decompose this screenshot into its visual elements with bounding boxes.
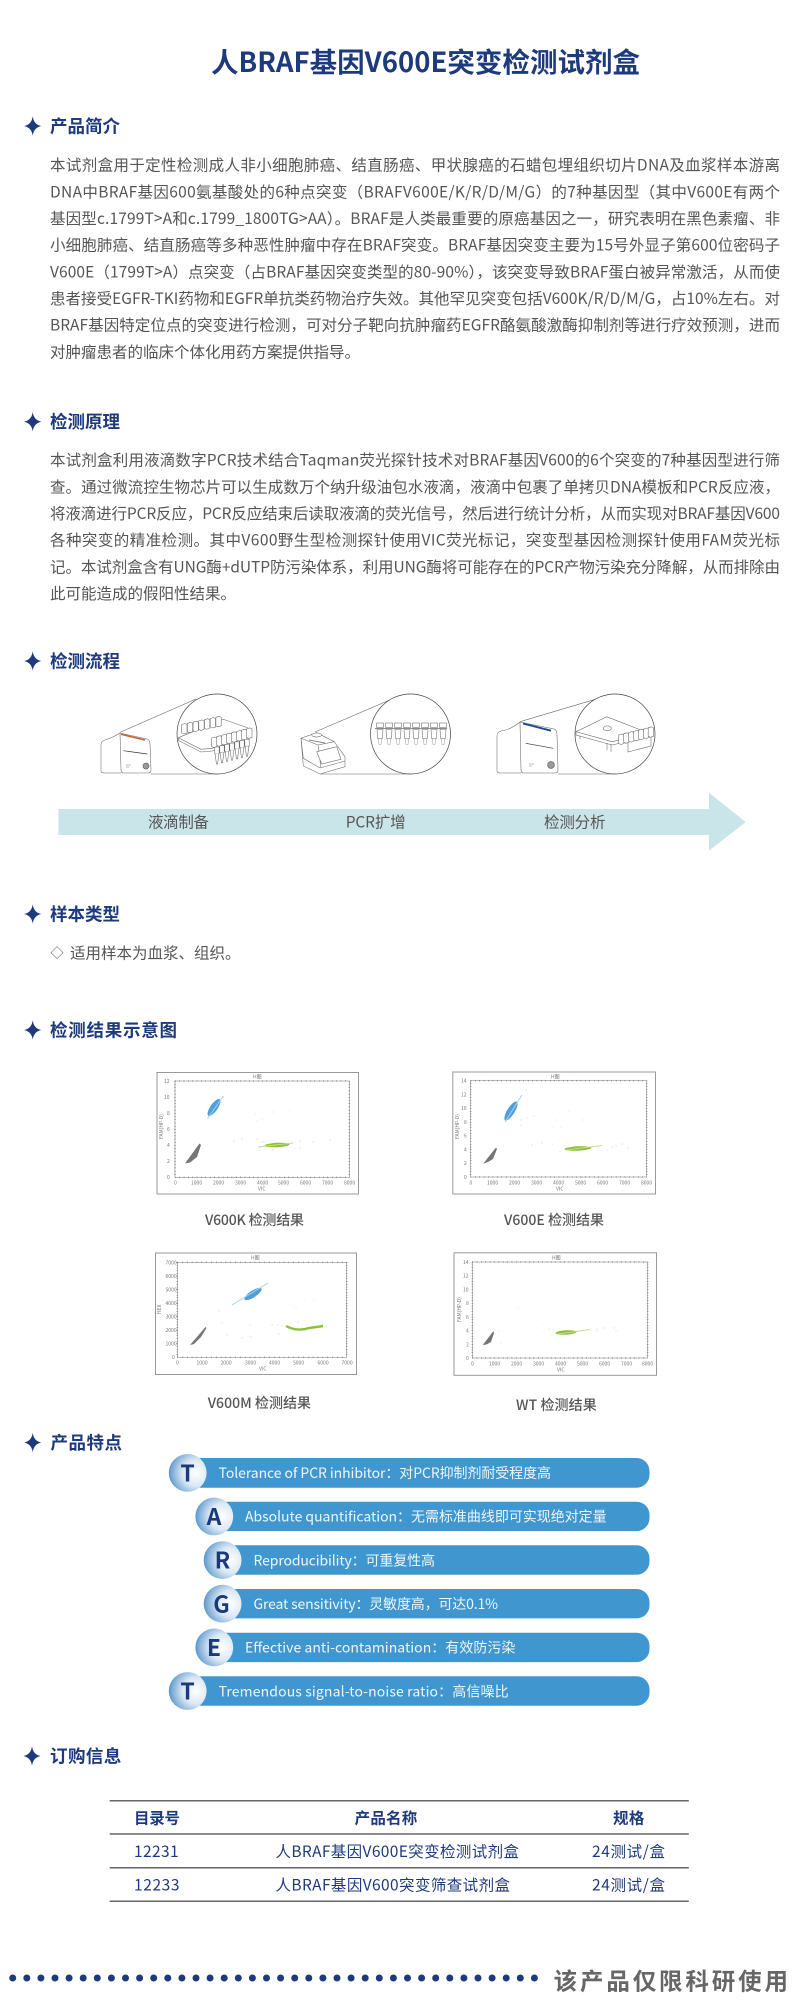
feature: R reproducibility: Reproducibility：可重复性高 [254,1550,435,1570]
chart: V600E result: FAM(HP-D) [454,1114,461,1139]
chart: WT result: 4000 [555,1360,566,1368]
chart: V600K result: 2000 [213,1180,224,1186]
text block: detection principle: 各种突变的精准检测。其中V600野生型检测探针使用VIC荧光标记，突变型基因检测探针使用FAM荧光标 [50,529,780,551]
chart: V600M result: 6000 [318,1360,329,1366]
chart: V600E result: 2000 [509,1180,520,1186]
chart: V600M result: 4000 [269,1360,280,1366]
feature: T tolerance: Tolerance of PCR inhibitor：对PCR抑制剂耐受程度高 [219,1463,551,1483]
table row 12233: 12233 [134,1874,180,1896]
chart: V600K result: 0 [167,1174,170,1181]
chart: V600M result: H图 [251,1254,260,1262]
table header row: 目录号 [134,1806,180,1828]
table header row [134,1806,645,1828]
chart: V600M result: 7000 [342,1360,353,1366]
chart: WT result: VIC [557,1366,565,1374]
feature: T tolerance [169,1454,650,1492]
chart: V600E result: 4000 [553,1180,564,1186]
chart label: V600M: V600M 检测结果 [207,1393,311,1413]
text block: product intro: 小细胞肺癌、结直肠癌等多种恶性肿瘤中存在BRAF突变。BRAF基因突变主要为15号外显子第600位密码子 [50,234,780,256]
chart: V600M result: 0 [172,1354,175,1361]
feature: E effective anti-contamination: E [207,1629,221,1663]
chart: V600K result: H图 [253,1074,262,1080]
chart: V600M result: 4000 [166,1300,177,1307]
chart: V600E result: 5000 [575,1180,586,1186]
step label: droplet generation: 液滴制备 [148,810,209,832]
section: product features [24,1430,650,1710]
chart: V600K result: 1000 [191,1180,202,1186]
table header row: 产品名称 [355,1806,418,1828]
table row 12231: 人BRAF基因V600E突变检测试剂盒 [276,1840,519,1862]
table row 12231: 24测试/盒 [592,1840,665,1862]
feature: T tremendous signal-to-noise: Tremendous signal-to-noise ratio：高信噪比 [219,1681,509,1701]
chart: WT result: 2 [466,1341,469,1348]
feature: R reproducibility: R [215,1542,231,1576]
section: detection principle [24,409,780,604]
chart: V600E result: 14 [461,1078,467,1085]
table row 12231: 12231 [134,1840,179,1862]
text block: product intro: 基因型c.1799T>A和c.1799_1800TG>AA）。BRAF是人类最重要的原癌基因之一，研究表明在黑色素瘤、非 [50,207,780,229]
chart: V600M result: 3000 [245,1360,256,1366]
section: result examples [24,1018,657,1415]
chart: WT result: 7000 [621,1360,632,1368]
chart label: V600E: V600E 检测结果 [503,1210,604,1230]
chart: WT result: 12 [463,1273,469,1280]
chart: WT result: 14 [463,1259,469,1266]
chart: V600E result: 1000 [487,1180,498,1186]
chart: WT result: 0 [466,1355,469,1362]
chart: V600K result: 8000 [344,1180,355,1186]
chart: V600M result: 1000 [196,1360,208,1366]
text block: product intro: 本试剂盒用于定性检测成人非小细胞肺癌、结直肠癌、甲状腺癌的石蜡包埋组织切片DNA及血浆样本游离 [50,154,780,176]
chart: V600K result: 4000 [257,1180,268,1186]
feature: A absolute quantification: Absolute quantification：无需标准曲线即可实现绝对定量 [245,1507,607,1527]
illustration: PCR thermal cycler with inset [301,694,450,774]
chart: V600K result: 10 [164,1094,170,1101]
text: sample type: ◇ [50,942,64,962]
feature: E effective anti-contamination: Effective anti-contamination：有效防污染 [245,1638,515,1658]
chart: V600M result: 7000 [166,1260,177,1266]
chart: WT result: 5000 [577,1360,588,1368]
chart: V600E result: 8000 [641,1180,652,1186]
chart: V600E result: 6 [464,1133,467,1140]
table header row: 规格 [613,1806,645,1828]
chart: V600E result: 10 [461,1105,467,1112]
chart: V600E result: 0 [470,1180,472,1186]
ordering table [110,1801,689,1901]
table row 12233: 24测试/盒 [592,1874,665,1896]
heading: result examples: 检测结果示意图 [50,1018,177,1042]
chart label: WT: WT 检测结果 [516,1395,597,1415]
chart: V600E result: 0 [464,1174,467,1181]
chart label: V600K: V600K 检测结果 [204,1210,304,1230]
chart: V600M result: 0 [176,1360,179,1366]
chart: V600E result [453,1072,656,1194]
section: product intro [24,114,780,362]
chart: V600K result: 7000 [322,1180,333,1186]
chart: WT result: 8 [466,1300,469,1307]
text block: product intro: V600E（1799T>A）点突变（占BRAF基因突变类型的80-90%），该突变导致BRAF蛋白被异常激活，从而使 [50,260,780,282]
chart: V600M result: 3000 [166,1314,177,1320]
chart: V600E result: 6000 [597,1180,608,1186]
text block: detection principle [50,449,780,604]
illustration: droplet reader with inset [497,694,655,774]
chart: V600M result: 2000 [166,1327,177,1334]
chart: WT result: 8000 [642,1360,653,1368]
feature: A absolute quantification [195,1498,649,1535]
feature: G great sensitivity [204,1585,650,1623]
chart: V600E result: 12 [461,1092,467,1098]
chart: WT result: 10 [463,1286,469,1293]
table row 12231 [134,1840,665,1862]
feature: T tolerance: T [180,1454,195,1488]
chart: WT result: 1000 [489,1360,500,1368]
chart: V600M result: 1000 [166,1340,177,1348]
chart: V600M result: 5000 [293,1360,304,1366]
chart: V600M result [156,1253,356,1374]
chart: WT result [454,1253,656,1375]
chart: V600M result: VIC [259,1366,267,1372]
heading: product intro: 产品简介 [50,114,120,138]
section: ordering information [23,1744,689,1901]
text block: detection principle: 本试剂盒利用液滴数字PCR技术结合Taqman荧光探针技术对BRAF基因V600的6个突变的7种基因型进行筛 [50,449,780,471]
heading: detection principle: 检测原理 [50,409,120,434]
chart: V600E result: 7000 [619,1180,630,1186]
heading: sample type: 样本类型 [50,902,120,926]
text block: product intro [50,154,780,362]
text block: detection principle: 查。通过微流控生物芯片可以生成数万个纳升级油包水液滴，液滴中包裹了单拷贝DNA模板和PCR反应液， [50,475,780,497]
chart: WT result: 2000 [511,1360,522,1368]
section: sample type [24,902,241,963]
chart: V600K result: 12 [164,1078,170,1085]
heading: workflow: 检测流程 [50,648,120,674]
title: 人BRAF基因V600E突变检测试剂盒 [211,40,640,80]
footer dots [13,1974,534,1982]
chart: V600E result: 3000 [531,1180,542,1186]
chart: V600K result: FAM(HP-D) [158,1114,165,1139]
chart: WT result: H图 [552,1254,561,1262]
text block: detection principle: 此可能造成的假阳性结果。 [50,582,236,604]
text: sample type: 适用样本为血浆、组织。 [70,941,241,963]
chart: V600M result: HEX [156,1304,163,1314]
feature: T tremendous signal-to-noise [169,1672,650,1710]
feature: T tremendous signal-to-noise: T [180,1673,195,1707]
chart: V600E result: 2 [464,1160,467,1167]
chart: WT result: 3000 [533,1360,544,1368]
heading: ordering information: 订购信息 [50,1744,121,1768]
text block: product intro: BRAF基因特定位点的突变进行检测，可对分子靶向抗肿瘤药EGFR酪氨酸激酶抑制剂等进行疗效预测，进而 [50,314,780,336]
chart: V600E result: VIC [556,1186,564,1192]
heading: product features: 产品特点 [50,1430,122,1455]
feature: A absolute quantification: A [206,1498,222,1532]
chart: V600K result: VIC [258,1186,266,1192]
illustration: droplet generator with inset [101,694,257,774]
chart: WT result: 6000 [599,1360,610,1368]
chart: V600K result: 6000 [300,1180,311,1186]
step label: PCR amplification: PCR扩增 [346,810,406,832]
chart: V600K result: 8 [167,1110,170,1117]
feature: R reproducibility [204,1541,650,1579]
chart: V600M result: 5000 [166,1286,177,1294]
chart: WT result: 6 [466,1314,469,1321]
footer note: 该产品仅限科研使用 [554,1962,788,1996]
chart: WT result: 0 [471,1360,474,1368]
step label: detection analysis: 检测分析 [544,810,606,832]
section: workflow [24,648,746,851]
chart: V600E result: 4 [464,1146,467,1154]
chart: V600K result: 4 [167,1142,170,1149]
feature: E effective anti-contamination [195,1628,649,1666]
text block: product intro: 对肿瘤患者的临床个体化用药方案提供指导。 [50,340,360,362]
text block: product intro: 患者接受EGFR-TKI药物和EGFR单抗类药物治疗失效。其他罕见突变包括V600K/R/D/M/G，占10%左右。对 [50,287,780,309]
chart: V600K result: 2 [167,1158,170,1165]
text block: detection principle: 记。本试剂盒含有UNG酶+dUTP防污染体系，利用UNG酶将可能存在的PCR产物污染充分降解，从而排除由 [50,555,780,577]
feature: G great sensitivity: G [213,1585,230,1619]
feature: G great sensitivity: Great sensitivity：灵敏度高，可达0.1% [254,1594,498,1614]
chart: V600K result: 0 [174,1180,177,1186]
chart: V600K result: 6 [167,1126,170,1133]
chart: V600K result: 3000 [235,1180,246,1186]
chart: V600M result: 2000 [220,1360,232,1366]
table row 12233: 人BRAF基因V600突变筛查试剂盒 [276,1874,510,1896]
chart: V600M result: 6000 [166,1273,177,1280]
text block: product intro: DNA中BRAF基因600氨基酸处的6种点突变（BRAFV600E/K/R/D/M/G）的7种基因型（其中V600E有两个 [50,180,780,202]
arrow: workflow [58,793,746,851]
chart: V600E result: H图 [551,1074,560,1080]
table row 12233 [134,1874,665,1896]
chart: WT result: 4 [466,1328,469,1335]
chart: WT result: FAM(HP-D) [456,1297,463,1322]
text block: detection principle: 将液滴进行PCR反应，PCR反应结束后读取液滴的荧光信号，然后进行统计分析，从而实现对BRAF基因V600 [50,502,780,524]
chart: V600K result [157,1072,358,1194]
chart: V600K result: 5000 [278,1180,289,1186]
chart: V600E result: 8 [464,1119,467,1126]
